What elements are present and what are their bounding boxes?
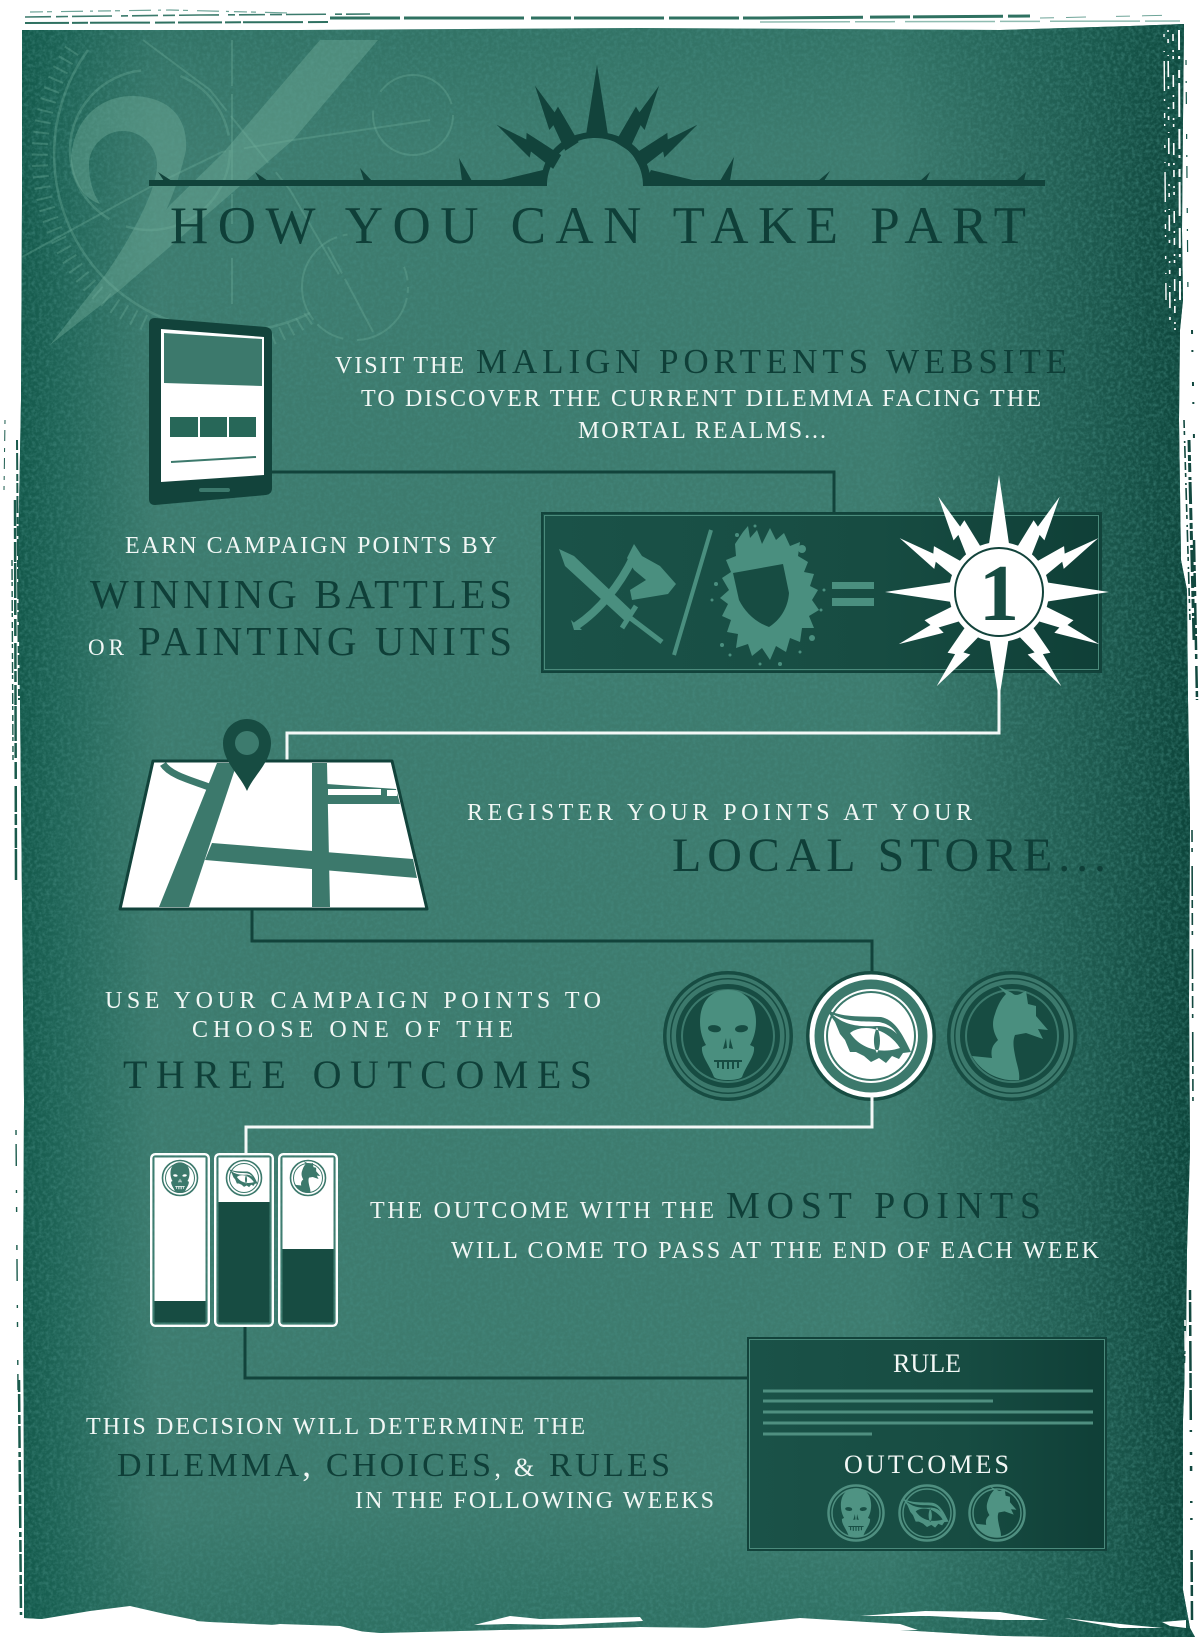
text: step 2: OR — [88, 635, 125, 660]
bar: eye outcome — [215, 1154, 273, 1326]
bar: skull outcome — [151, 1154, 209, 1326]
small dragon badge — [970, 1486, 1024, 1540]
text: step 6 — [86, 1414, 714, 1514]
crown rays — [586, 65, 608, 135]
panel: campaign points equation — [542, 513, 1101, 672]
small eye badge — [900, 1486, 954, 1540]
arch — [541, 132, 651, 186]
text: step 6: IN THE FOLLOWING WEEKS — [355, 1488, 714, 1514]
text: step 4: THREE OUTCOMES — [123, 1052, 592, 1097]
text: step 4: CHOOSE ONE OF THE — [192, 1017, 513, 1043]
text: step 6: DILEMMA, CHOICES, & RULES — [117, 1447, 670, 1484]
text: step 5: WILL COME TO PASS AT THE END OF EACH WEEK — [451, 1238, 1100, 1264]
text: step 5: THE OUTCOME WITH THE — [370, 1198, 714, 1224]
title: HOW YOU CAN TAKE PART — [170, 197, 1026, 255]
text: step 1: VISIT THE — [335, 353, 464, 379]
icon: sun point token — [885, 475, 1109, 700]
outcomes heading: OUTCOMES — [844, 1450, 1009, 1479]
text: step 2 — [88, 533, 512, 664]
icon: tablet — [149, 318, 272, 505]
small skull badge — [828, 1486, 884, 1540]
text: step 3 — [467, 800, 1106, 882]
horizon line — [149, 180, 547, 186]
text: step 2: PAINTING UNITS — [138, 618, 512, 664]
rule heading: RULE — [893, 1349, 961, 1378]
text: step 5 — [370, 1185, 1100, 1264]
text: step 5: MOST POINTS — [726, 1185, 1041, 1227]
header emblem: sun horizon — [149, 65, 1045, 186]
bottom torn white shards — [36, 1606, 1186, 1639]
text: step 4 — [105, 988, 601, 1097]
text: step 3: LOCAL STORE... — [672, 829, 1106, 882]
text: step 1 — [335, 342, 1067, 444]
step 1 connector — [270, 472, 834, 514]
connector: sun to map — [287, 690, 999, 762]
outcome badge: dragon — [947, 971, 1077, 1101]
text: step 1: TO DISCOVER THE CURRENT DILEMMA FACING THE — [361, 386, 1041, 412]
icon: crossed sword and axe — [559, 544, 676, 642]
background emblem: blade and spiral — [50, 40, 378, 345]
location pin — [223, 719, 271, 791]
chart: outcome point bars — [151, 1154, 337, 1326]
panel: rule card — [748, 1338, 1106, 1550]
text: step 3: REGISTER YOUR POINTS AT YOUR — [467, 800, 972, 826]
text: step 2: WINNING BATTLES — [90, 571, 512, 617]
connector: map to outcomes — [252, 909, 872, 972]
text: step 1: MORTAL REALMS... — [578, 418, 826, 444]
text: step 4: USE YOUR CAMPAIGN POINTS TO — [105, 988, 601, 1014]
equals sign — [832, 582, 874, 606]
connector: outcomes to bars — [246, 1096, 872, 1153]
slash — [674, 530, 711, 655]
text: step 6: THIS DECISION WILL DETERMINE THE — [86, 1414, 585, 1440]
icon: paint splat with shield — [710, 524, 826, 666]
icon: map with location pin — [120, 719, 427, 909]
connector: bars to rule panel — [245, 1326, 748, 1378]
outcome badge: skull — [663, 971, 793, 1101]
bar: dragon outcome — [279, 1154, 337, 1326]
text: step 1: MALIGN PORTENTS WEBSITE — [476, 342, 1067, 381]
outcome badge: eye (selected) — [806, 971, 936, 1101]
text: step 2: EARN CAMPAIGN POINTS BY — [125, 533, 497, 559]
icon: sun point token: 1 — [979, 550, 1019, 638]
background astrolabe lines — [22, 40, 453, 345]
rule text lines — [763, 1391, 1093, 1434]
